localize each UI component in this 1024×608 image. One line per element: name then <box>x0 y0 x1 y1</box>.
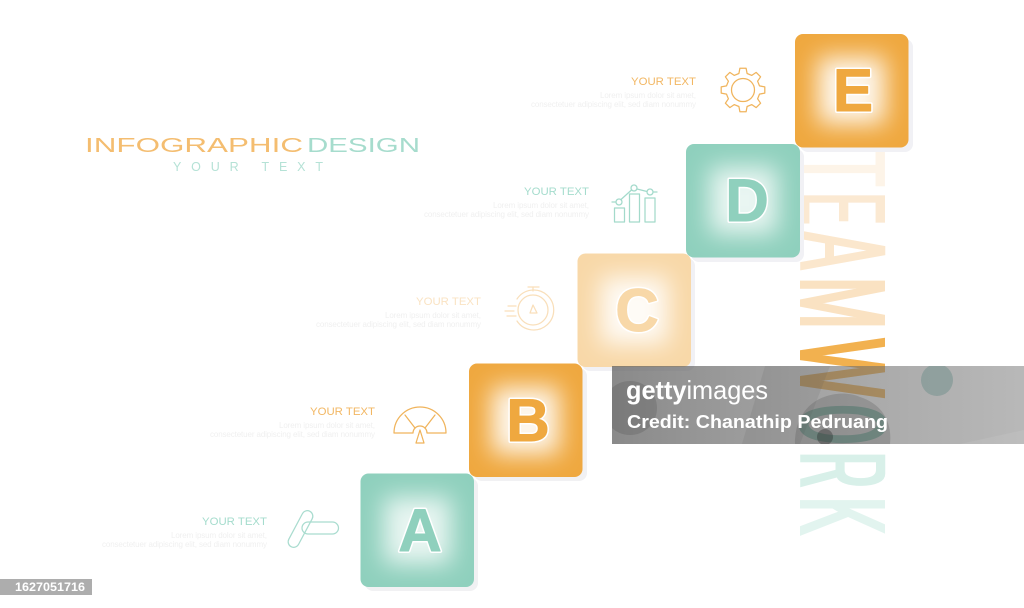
step A square: A <box>398 497 442 564</box>
step C square: C <box>615 277 659 344</box>
image id tag <box>0 579 92 595</box>
text block E: YOUR TEXT <box>631 76 696 88</box>
image id tag: 1627051716 <box>15 582 85 594</box>
vertical word: TEAMWORK: O <box>773 405 911 444</box>
vertical word: TEAMWORK: W <box>773 339 911 397</box>
text block C: YOUR TEXT <box>416 296 481 308</box>
vertical word: TEAMWORK: R <box>773 452 911 488</box>
watermark logo text: gettyimages <box>626 375 768 405</box>
subtitle: YOUR TEXT <box>173 160 323 174</box>
watermark credit: Credit: Chanathip Pedruang <box>627 411 888 432</box>
text: K <box>773 497 911 535</box>
text block D: consectetuer adipiscing elit, sed diam nonummy <box>424 210 589 219</box>
text block B: YOUR TEXT <box>310 406 375 418</box>
text block B <box>210 406 375 439</box>
step D square: D <box>725 167 769 234</box>
text block A: consectetuer adipiscing elit, sed diam nonummy <box>102 540 267 549</box>
step C square: C <box>615 277 659 344</box>
step B square <box>469 364 587 481</box>
title: INFOGRAPHIC <box>85 134 303 157</box>
text block B: consectetuer adipiscing elit, sed diam nonummy <box>210 430 375 439</box>
text block E <box>531 76 696 109</box>
vertical word: TEAMWORK: A <box>773 232 911 269</box>
title: DESIGN <box>307 134 420 157</box>
step C square <box>578 254 695 371</box>
icon: gear <box>721 68 765 112</box>
text block A <box>102 516 267 549</box>
step A square <box>360 474 478 591</box>
text block C: consectetuer adipiscing elit, sed diam nonummy <box>316 320 481 329</box>
step B square: B <box>506 387 550 454</box>
text block C: Lorem ipsum dolor sit amet, <box>385 311 481 320</box>
step D square: D <box>725 167 769 234</box>
text block E: consectetuer adipiscing elit, sed diam nonummy <box>531 100 696 109</box>
text block C <box>316 296 481 329</box>
step E square <box>795 34 913 152</box>
text block A: YOUR TEXT <box>202 516 267 528</box>
vertical word: TEAMWORK: E <box>773 193 911 224</box>
title <box>85 134 420 157</box>
icon: gauge <box>394 407 446 443</box>
text block A: Lorem ipsum dolor sit amet, <box>171 531 267 540</box>
step E square: E <box>833 57 873 124</box>
text block D: Lorem ipsum dolor sit amet, <box>493 201 589 210</box>
vertical word: TEAMWORK: M <box>773 277 911 329</box>
text block E: Lorem ipsum dolor sit amet, <box>600 91 696 100</box>
text block D: YOUR TEXT <box>524 186 589 198</box>
icon: bar chart with trend line <box>612 185 657 222</box>
step A square: A <box>398 497 442 564</box>
watermark band <box>603 364 1024 445</box>
step D square <box>686 144 804 262</box>
step E square: E <box>833 57 873 124</box>
vertical word: TEAMWORK: T <box>773 152 911 186</box>
text block D <box>424 186 589 219</box>
vertical word: TEAMWORK <box>773 152 911 535</box>
icon: stopwatch <box>505 287 554 330</box>
text block B: Lorem ipsum dolor sit amet, <box>279 421 375 430</box>
icon: chain link <box>286 509 338 549</box>
step B square: B <box>506 387 550 454</box>
